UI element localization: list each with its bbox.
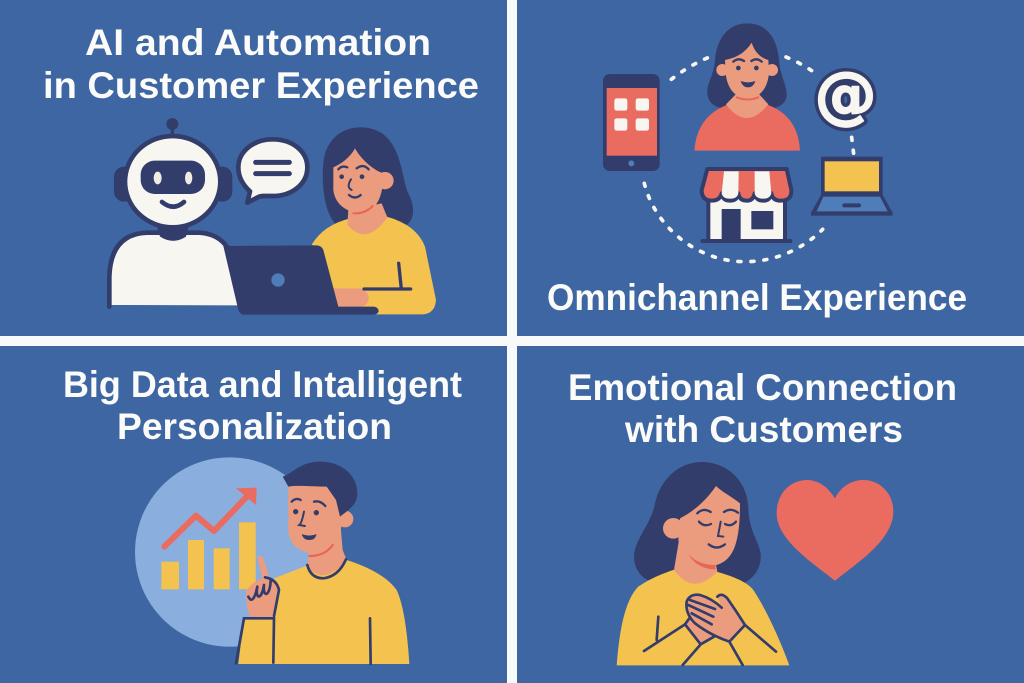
heading: Emotional Connection with Customers: Emotional Connection [568,367,957,408]
panel: Big Data and Personalization [0,346,507,683]
heading: Omnichannel Experience: Omnichannel Experience [547,277,967,318]
icon: woman [312,127,436,314]
icon: phone [603,74,660,171]
heading: Emotional Connection with Customers: with Customers [624,409,903,450]
icon: robot [109,118,237,307]
dotted connection ring [644,57,854,262]
heading: AI and Automation: AI and Automation [85,22,431,63]
icon: at sign: @ [815,58,877,131]
icon: folded hands [644,595,776,665]
illustration: channels around a customer [603,23,893,262]
icon: man [236,462,409,664]
heading: Emotional Connection with Customers [568,367,957,450]
icon: heart [777,480,893,581]
icon: woman with hands on heart [617,462,789,665]
panel: Emotional Connection [517,346,1024,683]
icon: speech bubble [238,139,307,203]
panel: AI and Automation [0,0,507,336]
illustration: man with growth chart [135,457,409,664]
icon: at sign: @ [815,58,877,131]
heading: AI and Automation [43,22,479,106]
heading: Big Data and Intalligent Personalization: Personalization [117,406,392,447]
illustration: robot and woman at laptop [109,118,436,315]
heading: Big Data and Intalligent Personalization [63,364,462,447]
arrow: upward trend [164,488,257,547]
circle backdrop [135,457,324,647]
icon: customer [694,23,800,151]
icon: storefront [702,169,791,241]
heading: Big Data and Intalligent Personalization: Big Data and Intalligent [63,364,462,405]
icon: laptop [811,157,893,216]
panel: Omnichannel Experience [517,0,1024,336]
heading: AI and Automation: in Customer Experience [43,65,479,106]
bar chart [161,522,256,589]
icon: laptop [223,245,411,315]
illustration: woman with heart [617,462,893,665]
